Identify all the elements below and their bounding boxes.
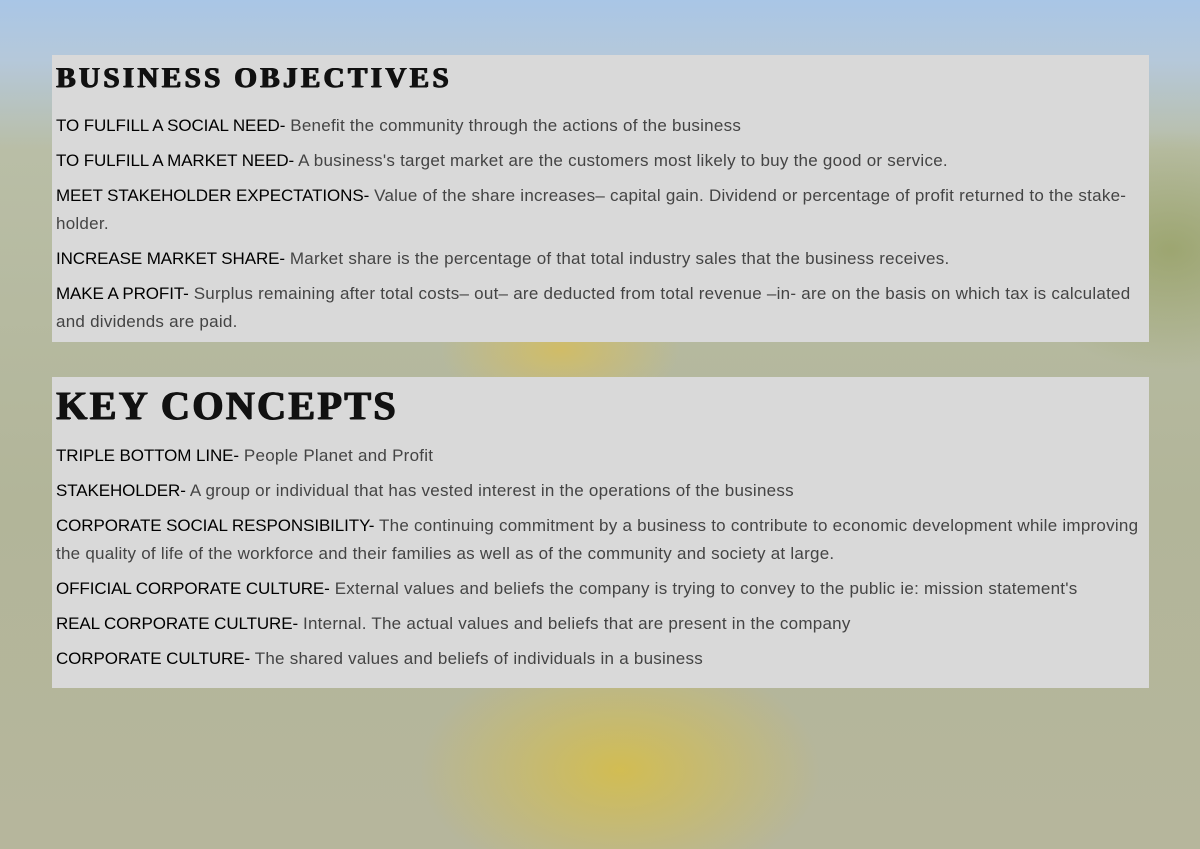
text: real culture: REAL CORPORATE CULTURE- Internal. The actual values and beliefs that are present in the company — [56, 614, 851, 633]
text: CSR: CORPORATE SOCIAL RESPONSIBILITY- The continuing commitment by a business to contribute to economic development while improving the quality of life of the workforce and their families as well as of the community and society at large. — [56, 516, 1138, 563]
text: market share: INCREASE MARKET SHARE- Market share is the percentage of that total industry sales that the business receives. — [56, 249, 950, 268]
text: stakeholder expectations: MEET STAKEHOLDER EXPECTATIONS- Value of the share increases– capital gain. Dividend or percentage of profit returned to the stake-holder. — [56, 186, 1126, 233]
text: social need: TO FULFILL A SOCIAL NEED- Benefit the community through the actions of the business — [56, 116, 741, 135]
text: profit: MAKE A PROFIT- Surplus remaining after total costs– out– are deducted from total revenue –in- are on the basis on which tax is calculated and dividends are paid. — [56, 284, 1130, 331]
text: corporate culture: CORPORATE CULTURE- The shared values and beliefs of individuals in a business — [56, 649, 703, 668]
panel: key concepts — [52, 377, 1149, 688]
text: official culture: OFFICIAL CORPORATE CULTURE- External values and beliefs the company is trying to convey to the public ie: mission statement's — [56, 579, 1078, 598]
text: stakeholder: STAKEHOLDER- A group or individual that has vested interest in the operations of the business — [56, 481, 794, 500]
panel: business objectives — [52, 55, 1149, 342]
text: market need: TO FULFILL A MARKET NEED- A business's target market are the customers most likely to buy the good or service. — [56, 151, 948, 170]
heading: business objectives: BUSINESS OBJECTIVES — [56, 62, 452, 94]
heading: key concepts: KEY CONCEPTS — [56, 383, 398, 428]
text: triple bottom line: TRIPLE BOTTOM LINE- People Planet and Profit — [56, 446, 433, 465]
